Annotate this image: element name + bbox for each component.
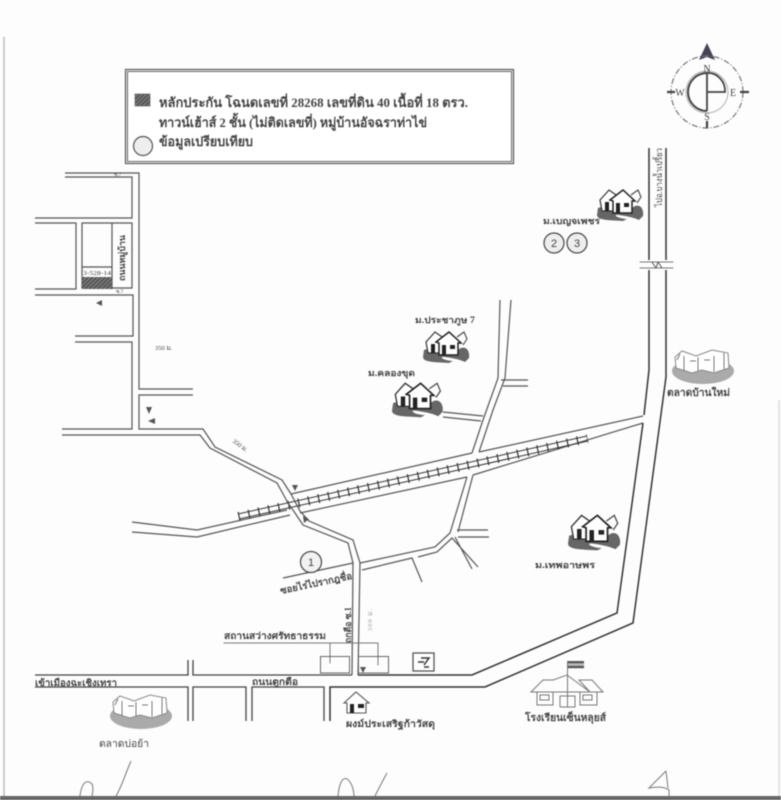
label: Klong Khut: ม.คลองขุด [368, 368, 415, 379]
comparison marker 3: 3 [574, 238, 580, 250]
label: Thep Athon: ม.เทพอาษพร [535, 560, 595, 570]
comparison marker 1: 1 [308, 557, 314, 569]
highway destination label: ไปอ.บางน้ำเปรี้ยว [652, 148, 664, 208]
label: vertical road name: ถกตือ ซ.1 [342, 607, 353, 643]
plot number: 3-528-14 [83, 271, 111, 277]
legend line 1: หลักประกัน โฉนดเลขที่ 28268 เลขที่ดิน 40 เนื้อที่ 18 ตรว. [159, 92, 468, 110]
compass: E [730, 88, 736, 99]
icon: small house [344, 692, 369, 713]
compass: S [704, 112, 710, 123]
icon: school with flag [531, 661, 603, 707]
label: road name: ถนนตูกตือ [252, 676, 298, 689]
road break symbol [640, 262, 673, 268]
compass [667, 43, 749, 128]
lot west of soi [320, 656, 350, 673]
subject plot hatch [82, 277, 112, 289]
market icon: Bo Ya [110, 695, 172, 729]
eastern highway and bottom main road [330, 148, 666, 721]
railway [238, 436, 588, 519]
legend hatch swatch [135, 94, 150, 106]
compass: N [703, 64, 711, 75]
house icon: Benjaphet [597, 190, 643, 221]
market icon: Ban Mai [672, 350, 734, 384]
comparison marker 3 [567, 233, 587, 253]
legend panel [126, 70, 514, 164]
house icon: Prachakhun 7 [423, 332, 469, 363]
label: soi name: ซอยไร่ไปรากฎชื่อ [279, 568, 353, 597]
label: lighting hall: สถานสว่างศรัทธาธรรม [224, 631, 326, 642]
lot east of soi [358, 656, 388, 673]
house icon: Thep Athon [568, 515, 620, 550]
label: to Chachoengsao: เข้าเมืองฉะเชิงเทรา [35, 677, 117, 689]
label: school: โรงเรียนเซ็นหลุยส์ [524, 710, 607, 724]
small road marks: ซ.7 [116, 289, 124, 295]
main east-west road beside railway [132, 416, 643, 537]
road north of railway [443, 300, 528, 453]
road network: upper-left housing estate [35, 173, 291, 503]
road south from railway to main road [288, 494, 360, 675]
icon: convenience store [413, 653, 434, 671]
comparison marker 2: 2 [551, 238, 557, 250]
small road marks: ซ.7 [114, 172, 122, 178]
label: Bo Ya market: ตลาดบ่อย้า [99, 738, 149, 750]
distance label 300 m: 300 ม. [367, 609, 374, 631]
legend comparison circle [134, 136, 152, 156]
bottom road west section [35, 660, 352, 721]
handwritten signatures [80, 761, 669, 797]
distance label diagonal: 350 ม. [231, 438, 249, 454]
label: Ban Mai market: ตลาดบ้านใหม่ [667, 386, 730, 399]
distance label 350 m: 350 ม. [155, 345, 173, 352]
label: Prachakhun 7: ม.ประชาภูษ 7 [415, 315, 476, 326]
soi road and eastern branches [283, 475, 489, 582]
leader line for lighting hall [224, 643, 378, 665]
small road marks [114, 172, 124, 295]
label: hardware store: ผงม์ประเสริฐก้าวัสดุ [346, 718, 435, 730]
direction arrows [96, 300, 366, 673]
estate road name: ถนนหมู่บ้าน [117, 234, 128, 281]
house icon: Klong Khut [392, 383, 443, 417]
comparison marker 2 [544, 233, 564, 253]
legend line 2: ทาวน์เฮ้าส์ 2 ชั้น (ไม่ติดเลขที่) หมู่บ้านอัจฉราท่าไข่ [159, 112, 427, 131]
label: Benjaphet: ม.เบญจเพชร [543, 216, 600, 227]
legend line 3: ข้อมูลเปรียบเทียบ [159, 134, 253, 150]
comparison marker 1 [300, 552, 322, 572]
compass: W [675, 88, 685, 99]
